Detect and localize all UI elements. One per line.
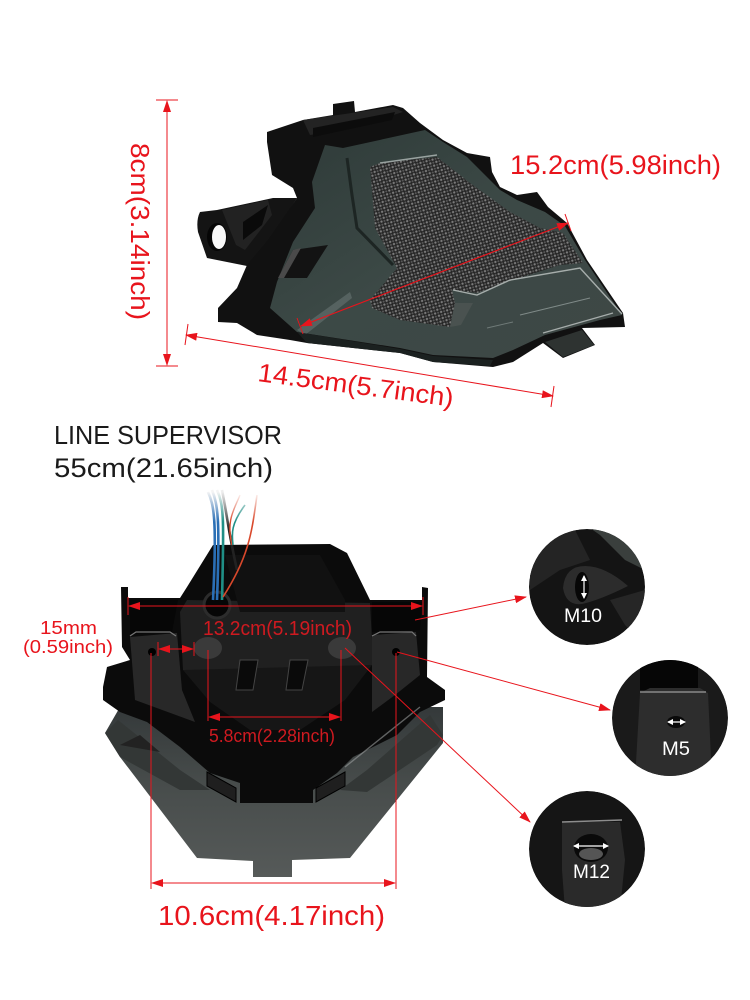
dimension: diagonal 15.2cm: 15.2cm(5.98inch) (510, 150, 721, 180)
dimension: diagonal 15.2cm (297, 150, 721, 334)
detail circle: M5: M5 (662, 739, 690, 760)
detail circle: M10 (529, 528, 645, 645)
arrow: to M10 detail (415, 597, 526, 620)
detail circle: M10: M10 (564, 606, 602, 627)
detail circle: M12 (529, 791, 645, 910)
wires (208, 490, 257, 600)
photo: tail light, rear view (103, 490, 445, 877)
heading: line supervisor length: 55cm(21.65inch) (54, 453, 273, 483)
heading: line supervisor length: LINE SUPERVISOR (54, 420, 282, 450)
dimension: hole spacing 5.8cm: 5.8cm(2.28inch) (209, 726, 335, 746)
dimension: hole spacing 5.8cm (208, 650, 341, 746)
dimension: length 14.5cm (185, 324, 554, 413)
dimension: 15mm spacing: (0.59inch) (23, 637, 113, 657)
dimension: bottom width 10.6cm: 10.6cm(4.17inch) (158, 900, 385, 931)
arrow: to M5 detail (397, 652, 610, 710)
detail circle: M5 (612, 660, 728, 780)
dimension: width 13.2cm: 13.2cm(5.19inch) (203, 618, 352, 640)
photo: tail light, angled view (197, 101, 625, 367)
heading: line supervisor length (54, 420, 282, 483)
dimension: length 14.5cm: 14.5cm(5.7inch) (256, 357, 455, 413)
dimension: height 8cm: 8cm(3.14inch) (125, 143, 155, 320)
dimension: 15mm spacing (23, 618, 194, 657)
arrow: to M12 detail (345, 648, 530, 822)
detail circle: M12: M12 (573, 862, 610, 883)
infographic canvas (24, 100, 728, 931)
dimension: 15mm spacing: 15mm (40, 618, 97, 638)
